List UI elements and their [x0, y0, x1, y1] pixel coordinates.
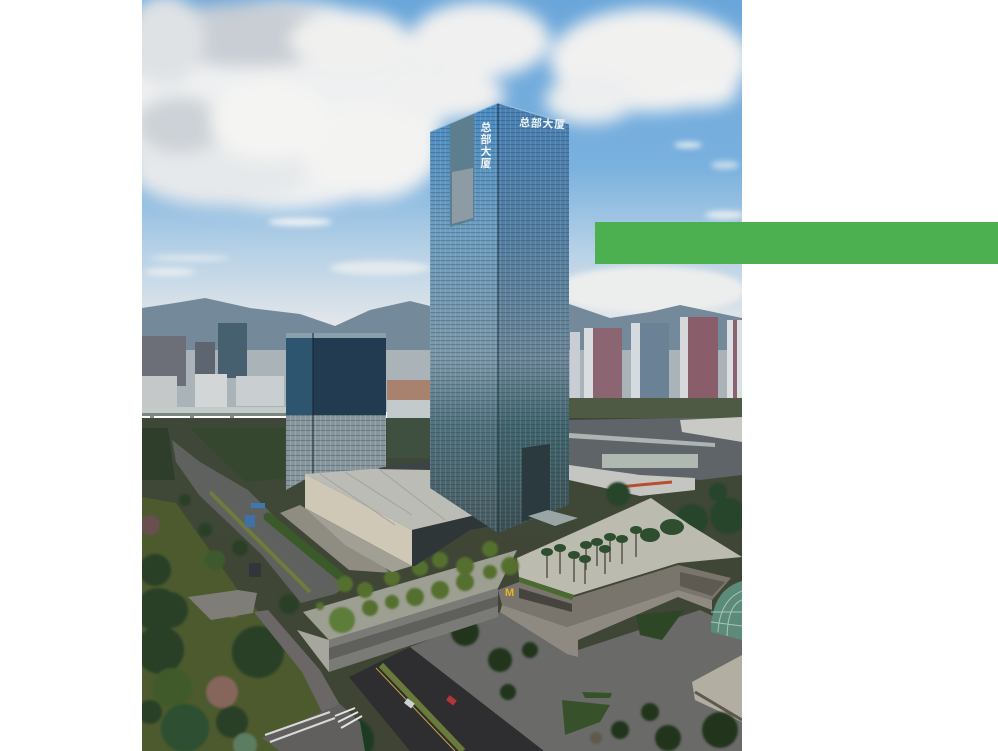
- boulevard roads: [172, 440, 391, 751]
- tower signage left: 总: [480, 120, 492, 134]
- plaza with palms: [517, 498, 742, 595]
- tower two: [286, 333, 386, 490]
- L-shaped mall: [498, 565, 731, 657]
- elevated highway: [142, 400, 430, 418]
- glass dome: [711, 581, 742, 640]
- tower signage left: 厦: [480, 157, 492, 170]
- tower left face: [430, 103, 498, 533]
- white podium: [305, 469, 497, 572]
- tower signage right: 总部大厦: [519, 115, 566, 131]
- main tower: [430, 103, 569, 533]
- low block behind podium: [378, 460, 430, 470]
- distant city: [142, 317, 742, 422]
- photo: aerial view of tower complex: [142, 0, 742, 751]
- main road under bridge: [349, 647, 544, 751]
- canopy at tower base: [528, 510, 578, 526]
- reflection panel: [450, 114, 474, 227]
- sky with clouds: [115, 0, 750, 330]
- plaza lower right: [410, 610, 742, 751]
- tower signage left: 部: [480, 132, 492, 146]
- tower right face: [498, 103, 569, 533]
- tower signage left: 大: [480, 144, 492, 158]
- green banner bar: [595, 222, 998, 264]
- ground base: [142, 418, 742, 751]
- mountains: [142, 298, 742, 350]
- park and trees left: [136, 428, 374, 751]
- station buildings right: [569, 417, 746, 536]
- L-shaped mall: M: [505, 587, 514, 599]
- sky bridge with roof garden: [297, 541, 519, 672]
